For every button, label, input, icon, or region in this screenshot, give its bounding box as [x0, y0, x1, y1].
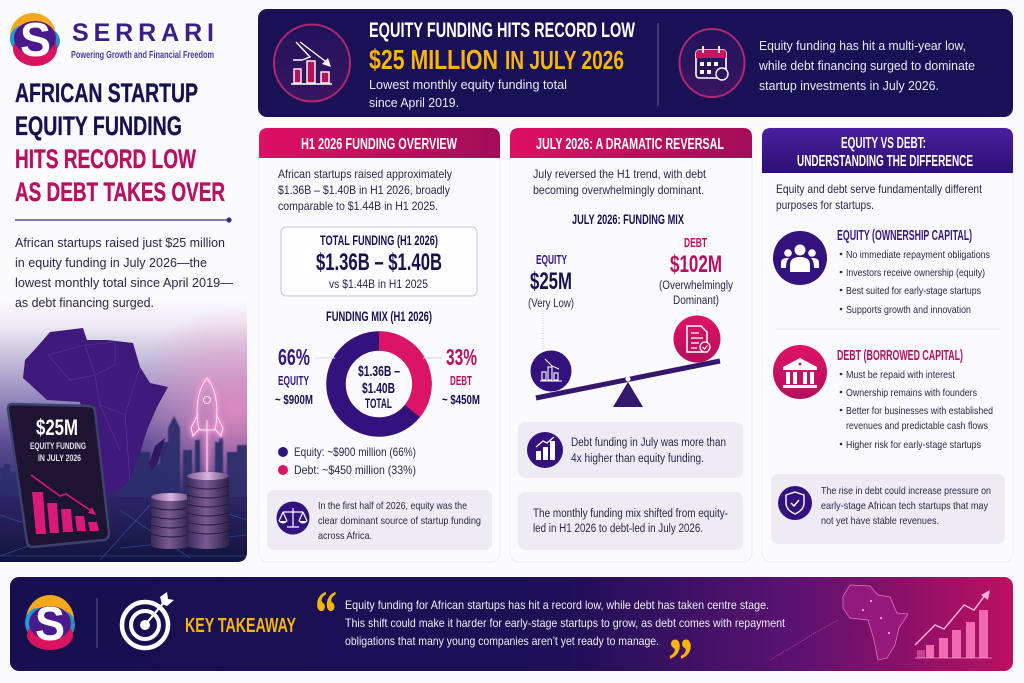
icon: scales [276, 502, 310, 534]
panel: H1 2026 funding overview [259, 128, 500, 562]
banner headline: since April 2019. [369, 95, 459, 110]
legend: Equity: ~$900 million (66%) [294, 445, 416, 459]
panel: equity vs debt [762, 128, 1013, 562]
equity value: (Very Low) [528, 298, 574, 310]
callout: equity dominant: clear dominant source of startup funding [318, 515, 481, 527]
callout: equity dominant: In the first half of 2026, equity was the [318, 500, 467, 512]
funding mix heading: FUNDING MIX (H1 2026) [326, 308, 432, 324]
overview text: comparable to $1.44B in H1 2025. [278, 199, 438, 213]
tablet: IN JULY 2026 [38, 453, 81, 463]
logo: Serrari [10, 13, 214, 67]
total funding box: TOTAL FUNDING (H1 2026) [320, 232, 438, 248]
Africa map [23, 328, 168, 495]
legend [278, 445, 416, 477]
legend: Debt: ~$450 million (33%) [294, 463, 416, 477]
debt label [423, 344, 480, 407]
title: EQUITY FUNDING [15, 111, 182, 141]
debt value [659, 235, 733, 307]
title [15, 78, 225, 207]
title: AS DEBT TAKES OVER [15, 177, 225, 207]
callout: pressure [771, 474, 1005, 544]
donut chart: TOTAL [365, 395, 392, 411]
debt value: DEBT [684, 235, 707, 250]
intro text: African startups raised just $25 million [15, 235, 225, 250]
sky [0, 300, 247, 500]
reversal text [533, 167, 707, 197]
comparison intro: purposes for startups. [776, 198, 874, 212]
banner side text: Equity funding has hit a multi-year low, [759, 38, 966, 53]
banner side text: startup investments in July 2026. [759, 78, 939, 93]
equity list [837, 228, 990, 316]
total funding box [281, 227, 477, 296]
seesaw [530, 310, 720, 407]
equity list: No immediate repayment obligations [846, 249, 990, 261]
panel header [762, 128, 1013, 173]
callout: 4x higher: 4x higher than equity funding. [571, 453, 704, 465]
overview text: African startups raised approximately [278, 167, 452, 181]
takeaway text: This shift could make it harder for early-stage startups to grow, as debt comes with repayment [345, 616, 786, 630]
icon: growth chart [527, 432, 563, 468]
panel header [510, 128, 752, 158]
equity list: Best suited for early-stage startups [846, 285, 981, 297]
donut chart [336, 341, 422, 427]
banner side text: while debt financing surged to dominate [758, 58, 975, 73]
total funding box: vs $1.44B in H1 2025 [329, 277, 428, 291]
coin stack: right [187, 472, 229, 549]
debt value: Dominant) [673, 295, 719, 307]
icon: shield [778, 486, 812, 520]
logo: Serrari: Powering Growth and Financial Freedom [71, 49, 214, 61]
intro text: in equity funding in July 2026—the [15, 255, 207, 270]
icon: bank [773, 345, 827, 399]
debt label: DEBT [450, 373, 472, 388]
banner headline: IN JULY 2026 [505, 45, 624, 75]
takeaway text: Equity funding for African startups has hit a record low, while debt has taken centre stage. [345, 598, 769, 612]
donut chart: $1.36B – [358, 363, 400, 380]
equity list: Supports growth and innovation [846, 304, 971, 316]
icon: target [122, 592, 174, 648]
skyline [0, 416, 247, 500]
takeaway text [345, 598, 786, 648]
callout: pressure: early-stage African tech startups that may [821, 500, 989, 512]
callout: mix shifted [518, 492, 743, 550]
equity label: EQUITY [278, 373, 309, 388]
Africa network map [770, 585, 908, 660]
banner side text [758, 38, 975, 93]
total funding box: $1.36B – $1.40B [316, 249, 442, 276]
banner headline: $25 MILLION [369, 44, 498, 75]
comparison intro [776, 182, 983, 212]
equity value: $25M [530, 268, 572, 295]
equity value [528, 252, 574, 310]
debt list: Better for businesses with established [846, 405, 993, 417]
logo mark [25, 595, 75, 651]
debt list: revenues and predictable cash flows [846, 420, 988, 432]
banner headline: Lowest monthly equity funding total [369, 77, 567, 92]
intro text: as debt financing surged. [15, 295, 154, 310]
panel header: H1 2026 FUNDING OVERVIEW [301, 136, 458, 153]
panel header: JULY 2026: A DRAMATIC REVERSAL [536, 136, 724, 153]
debt value: (Overwhelmingly [659, 280, 733, 292]
reversal text: becoming overwhelmingly dominant. [533, 183, 704, 197]
banner headline: EQUITY FUNDING HITS RECORD LOW [369, 19, 635, 42]
donut chart: $1.40B [362, 380, 395, 397]
callout: pressure: The rise in debt could increase pressure on [821, 485, 991, 497]
banner headline [369, 19, 635, 110]
equity label: 66% [278, 344, 310, 370]
tablet [8, 404, 109, 547]
coin stack: left [151, 493, 191, 549]
callout: mix shifted: led in H1 2026 to debt-led in July 2026. [533, 523, 703, 535]
rocket outline [191, 378, 223, 474]
equity list: Investors receive ownership (equity) [846, 267, 985, 279]
funding mix heading: JULY 2026: FUNDING MIX [572, 211, 684, 227]
tablet: $25M [36, 415, 78, 440]
panel header: EQUITY VS DEBT: [841, 135, 926, 152]
icon: calendar [680, 29, 744, 97]
callout: mix shifted: The monthly funding mix shifted from equity- [533, 508, 728, 520]
key takeaway label: KEY TAKEAWAY [185, 615, 296, 637]
debt label: ~ $450M [442, 393, 480, 407]
debt list [837, 348, 993, 451]
illustration: Africa map, tablet, coins and rocket [0, 300, 247, 562]
callout: equity dominant: across Africa. [318, 530, 372, 542]
bar chart with rising arrow [915, 590, 992, 658]
tablet: EQUITY FUNDING [30, 441, 86, 451]
debt value: $102M [670, 251, 722, 278]
equity value: EQUITY [536, 252, 567, 267]
title: AFRICAN STARTUP [15, 78, 198, 108]
intro text [15, 235, 233, 310]
icon: equity coin [530, 350, 572, 392]
logo: Serrari: SERRARI [72, 19, 214, 47]
callout: 4x higher: Debt funding in July was more than [571, 437, 726, 449]
panel: July 2026 dramatic reversal [510, 128, 752, 562]
debt list: Ownership remains with founders [846, 387, 977, 399]
banner: equity funding hits record low [258, 9, 1013, 117]
icon: falling chart [274, 24, 350, 102]
ground with network lines [0, 497, 247, 562]
divider with dot [15, 217, 232, 223]
overview text [278, 167, 452, 213]
debt list: Must be repaid with interest [846, 369, 955, 381]
banner: key takeaway [10, 577, 1013, 683]
icon: people [773, 231, 827, 285]
reversal text: July reversed the H1 trend, with debt [533, 167, 707, 181]
equity label [275, 344, 335, 407]
overview text: $1.36B – $1.40B in H1 2026, broadly [278, 183, 450, 197]
panel header [259, 128, 500, 158]
opening quote: “ [315, 577, 337, 648]
logo: Serrari: S [20, 14, 51, 67]
callout: 4x higher [518, 422, 743, 478]
debt list: Higher risk for early-stage startups [846, 439, 981, 451]
callout: pressure: not yet have stable revenues. [821, 515, 939, 527]
equity label: ~ $900M [275, 393, 313, 407]
icon: debt document [674, 316, 720, 362]
title: HITS RECORD LOW [15, 144, 196, 174]
logo mark: S [35, 598, 65, 651]
callout: equity dominant [267, 490, 492, 550]
intro text: lowest monthly total since April 2019— [15, 275, 233, 290]
comparison intro: Equity and debt serve fundamentally different [776, 182, 983, 196]
debt label: 33% [446, 344, 477, 370]
takeaway text: obligations that many young companies aren’t yet ready to manage. [345, 634, 659, 648]
